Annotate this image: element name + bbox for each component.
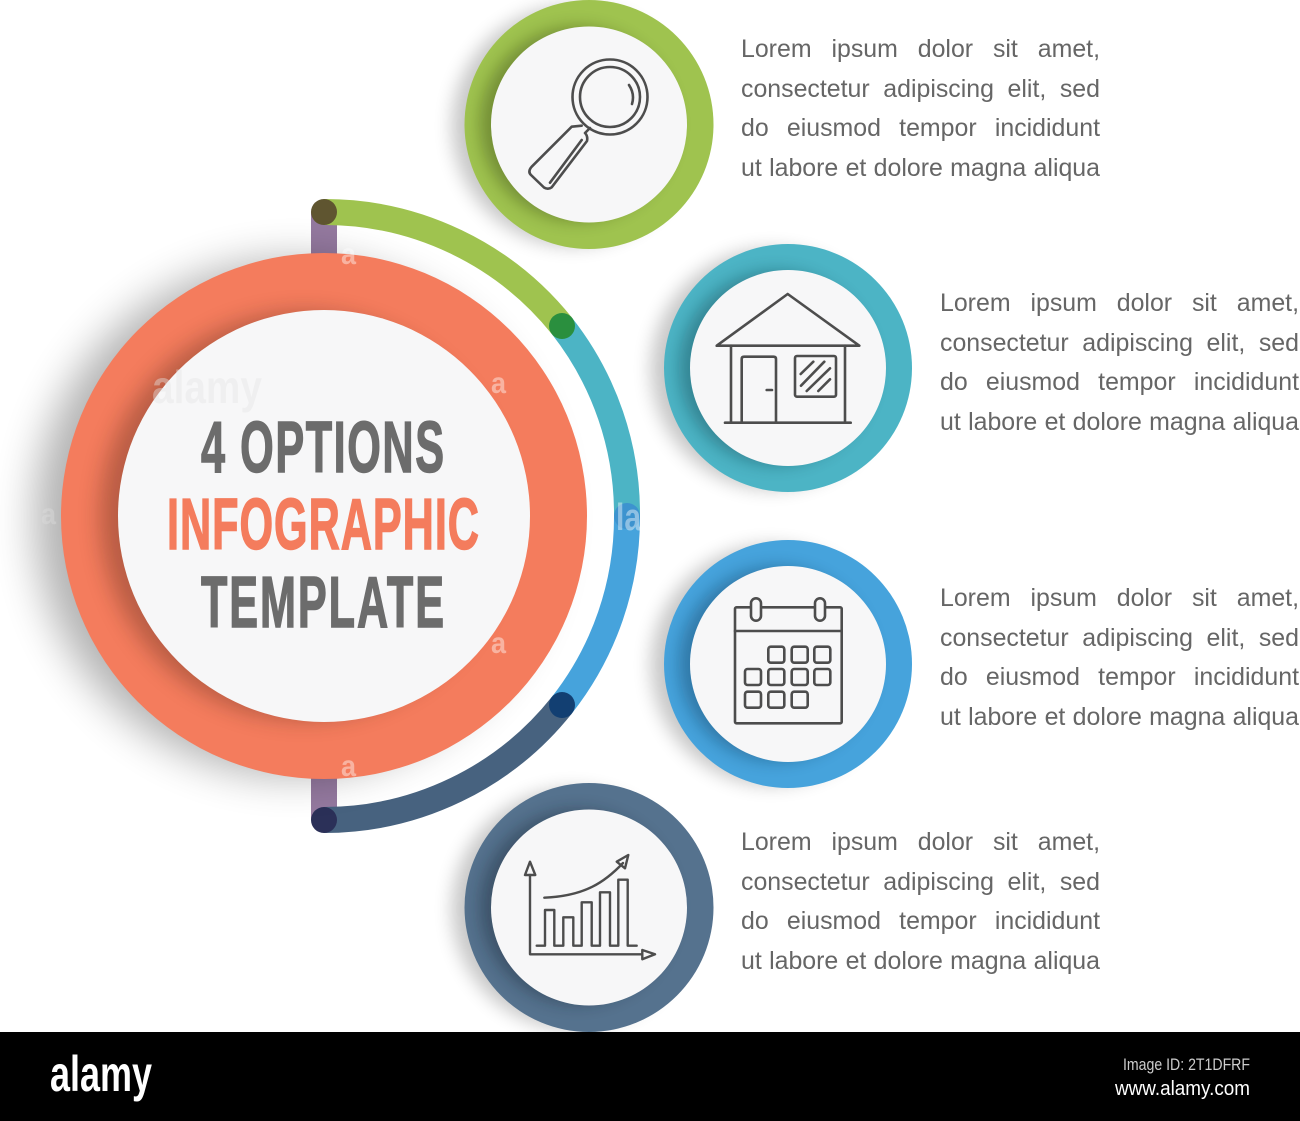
title: TEMPLATE [201,562,444,643]
watermark marks: alamy [152,361,262,413]
title [167,407,479,643]
option 3: blue circle [651,540,912,788]
option 2: teal circle [651,244,912,492]
text block: option 3: Lorem ipsum dolor sit amet, [940,584,1299,612]
footer bar [0,1032,1300,1121]
icon: calendar [735,598,842,723]
connector: purple vertical bars [311,212,337,820]
watermark marks: a [491,367,506,400]
option 4: slate circle [452,783,714,1032]
watermark marks: a [491,627,506,660]
text block: option 4: Lorem ipsum dolor sit amet, [741,828,1100,856]
text block: option 2 [940,289,1299,436]
watermark marks: a [341,750,356,783]
footer bar: www.alamy.com [1114,1078,1250,1100]
option 1: green circle [452,0,714,249]
icon: magnifying glass [529,60,648,189]
text block: option 1: consectetur adipiscing elit, sed [741,75,1100,103]
footer bar: alamy [50,1046,152,1102]
footer bar: Image ID: 2T1DFRF [1123,1055,1250,1074]
segmented arc connector [311,199,640,833]
text block: option 3 [940,584,1299,731]
text block: option 4 [741,828,1100,975]
icon: house [717,294,859,423]
watermark marks: a [341,238,356,271]
text block: option 3: do eiusmod tempor incididunt [940,663,1299,691]
title: 4 OPTIONS [201,407,444,488]
text block: option 1: do eiusmod tempor incididunt [741,114,1100,142]
text block: option 1: ut labore et dolore magna aliqua [741,154,1100,182]
text block: option 2: ut labore et dolore magna aliqua [940,408,1299,436]
text block: option 2: Lorem ipsum dolor sit amet, [940,289,1299,317]
text block: option 4: do eiusmod tempor incididunt [741,907,1100,935]
watermark marks: a [41,498,56,531]
text block: option 2: do eiusmod tempor incididunt [940,368,1299,396]
text block: option 1 [741,35,1100,182]
text block: option 4: ut labore et dolore magna aliqua [741,947,1100,975]
icon: growth chart [525,855,655,959]
main circle: coral ring with centre disc [35,253,587,779]
text block: option 3: ut labore et dolore magna aliqua [940,703,1299,731]
text block: option 4: consectetur adipiscing elit, sed [741,868,1100,896]
watermark marks: la [616,497,642,539]
watermark marks [41,238,642,783]
title: INFOGRAPHIC [167,484,479,565]
text block: option 3: consectetur adipiscing elit, sed [940,624,1299,652]
text block: option 2: consectetur adipiscing elit, sed [940,329,1299,357]
text block: option 1: Lorem ipsum dolor sit amet, [741,35,1100,63]
